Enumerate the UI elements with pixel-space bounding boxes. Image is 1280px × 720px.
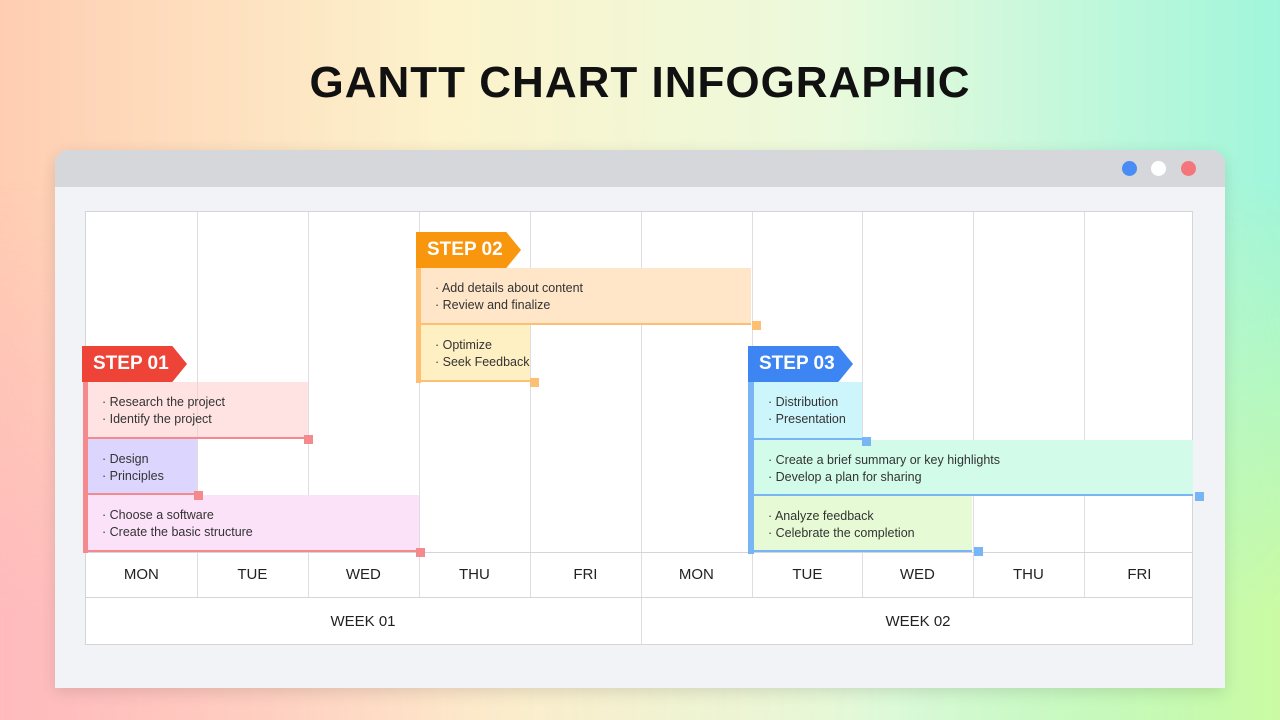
step 02 row 2: · Optimize xyxy=(435,338,492,352)
step 02 row 1: · Review and finalize xyxy=(435,298,550,312)
day labels: WED xyxy=(900,566,935,583)
step 02 row 1: · Add details about content xyxy=(435,281,583,295)
window title bar xyxy=(55,150,1225,187)
step 01 row 2: · Design xyxy=(102,452,149,466)
step 01 row 3: · Choose a software xyxy=(102,508,214,522)
step 01 row 3 xyxy=(88,495,419,552)
step 02 flag: STEP 02 xyxy=(427,239,503,260)
step 03 group xyxy=(748,346,1204,556)
step 03 row 2 xyxy=(754,440,1193,496)
step 03 row 1: · Distribution xyxy=(768,395,838,409)
step 01 row 2: · Principles xyxy=(102,469,164,483)
step 01 row 1: · Research the project xyxy=(102,395,225,409)
step 01 row 3: · Create the basic structure xyxy=(102,525,253,539)
step 01 row 2 xyxy=(88,439,197,495)
step 01 row 1 xyxy=(88,382,308,439)
day labels: TUE xyxy=(237,566,267,583)
week labels: WEEK 01 xyxy=(330,613,396,630)
step 03 row 2: · Develop a plan for sharing xyxy=(768,470,922,484)
step 02 row 1 xyxy=(421,268,751,325)
step 03 flag: STEP 03 xyxy=(759,353,835,374)
gantt grid xyxy=(85,211,1193,645)
window frame xyxy=(55,150,1225,688)
step 03 row 2: · Create a brief summary or key highlights xyxy=(768,453,1000,467)
step 01 group xyxy=(82,346,425,557)
day labels: TUE xyxy=(792,566,822,583)
step 03 row 1 xyxy=(754,382,862,440)
step 01 flag: STEP 01 xyxy=(93,353,169,374)
icon: white dot xyxy=(1151,161,1166,176)
step 02 row 2: · Seek Feedback xyxy=(435,355,530,369)
day labels: FRI xyxy=(573,566,597,583)
step 02 flag xyxy=(416,232,521,268)
day labels: WED xyxy=(346,566,381,583)
step 01 flag xyxy=(82,346,187,382)
step 02 row 2 xyxy=(421,325,530,382)
title: GANTT CHART INFOGRAPHIC xyxy=(310,58,970,107)
step 03 row 3: · Analyze feedback xyxy=(768,509,874,523)
day labels xyxy=(124,566,1151,583)
step 01 row 1: · Identify the project xyxy=(102,412,212,426)
day labels: MON xyxy=(124,566,159,583)
step 02 group xyxy=(416,232,761,387)
day labels: THU xyxy=(459,566,490,583)
day labels: FRI xyxy=(1127,566,1151,583)
icon: red dot xyxy=(1181,161,1196,176)
week labels: WEEK 02 xyxy=(885,613,951,630)
step 03 row 1: · Presentation xyxy=(768,412,846,426)
day labels: MON xyxy=(679,566,714,583)
icon: blue dot xyxy=(1122,161,1137,176)
step 03 row 3: · Celebrate the completion xyxy=(768,526,915,540)
step 03 row 3 xyxy=(754,496,972,552)
day labels: THU xyxy=(1013,566,1044,583)
step 03 flag xyxy=(748,346,853,382)
week labels xyxy=(330,613,951,630)
